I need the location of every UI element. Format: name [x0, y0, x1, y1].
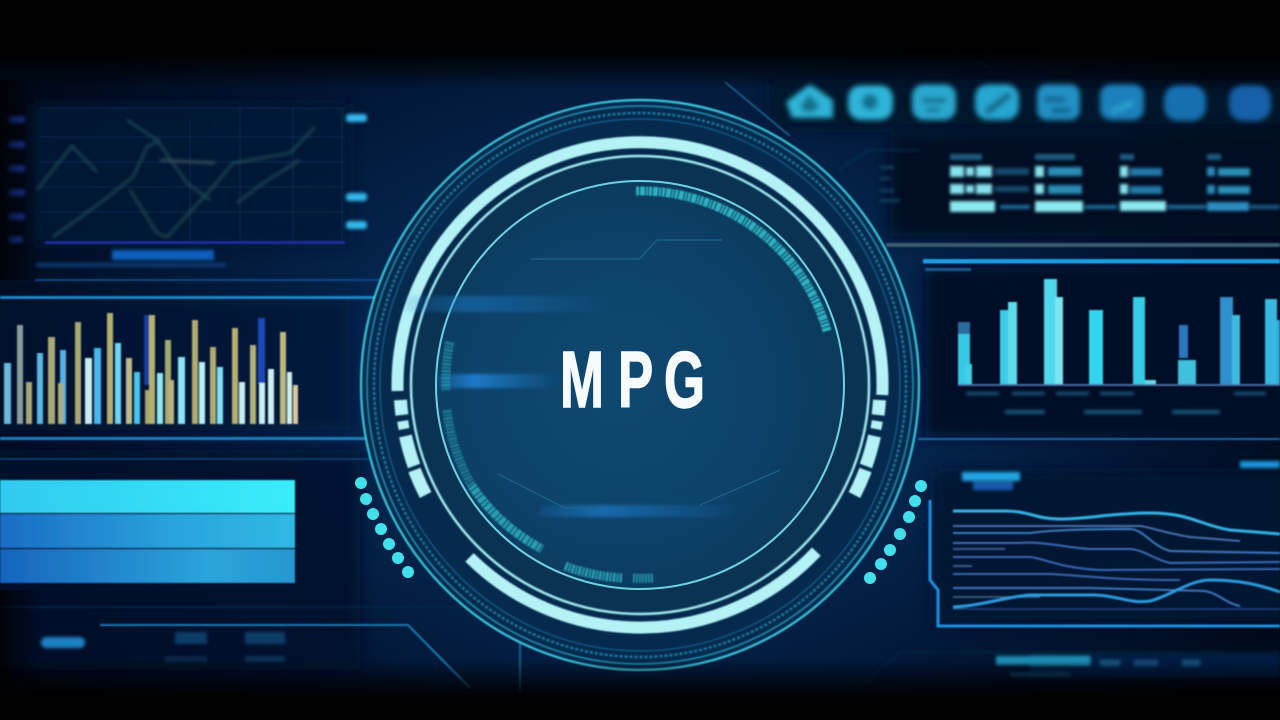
faint lines	[953, 526, 1280, 609]
top pill	[1240, 461, 1280, 468]
gauge middle field	[411, 156, 869, 614]
bottom bright line	[953, 580, 1280, 607]
readout blocks	[165, 632, 285, 662]
icon: tile 1	[786, 84, 833, 118]
gauge thick ring arcs	[398, 142, 883, 628]
vertical tick	[519, 642, 521, 690]
data text arcs	[446, 191, 827, 578]
right divider lines	[240, 46, 1280, 440]
left axis pills	[8, 116, 25, 243]
panel: top right data table	[838, 150, 1280, 212]
progress dots: right	[864, 480, 927, 584]
title: MPG	[560, 336, 705, 425]
table row 2	[950, 184, 1250, 194]
panel: top left line chart	[8, 108, 367, 267]
bar chart: left tan and blue bars	[4, 313, 298, 424]
circuit traces	[498, 240, 780, 508]
table header row	[950, 154, 1221, 160]
chart frame	[930, 500, 1280, 626]
bar chart: right cyan bars	[925, 268, 1280, 414]
gauge inner ring	[411, 156, 869, 614]
chart grid	[40, 108, 345, 243]
progress dots: left	[355, 477, 414, 578]
top bright line	[953, 511, 1280, 534]
chart axis	[45, 241, 345, 244]
table row 3	[950, 201, 1280, 212]
table row 1	[950, 166, 1250, 177]
icon: tile 3	[912, 84, 956, 120]
icon: tile 2	[848, 85, 893, 120]
bracket line	[100, 625, 470, 688]
bar chart caption	[925, 268, 971, 271]
gauge: central circular dial	[361, 100, 919, 670]
panel: right line chart	[930, 461, 1280, 626]
icon: tile 5	[1037, 84, 1080, 120]
readout pill	[41, 637, 85, 648]
table side labels	[880, 166, 900, 202]
chart caption	[36, 250, 226, 267]
gauge outer rings	[361, 100, 919, 670]
panel: top right icon row	[786, 84, 1271, 121]
chart lines	[37, 120, 315, 237]
gauge outer field	[361, 100, 919, 670]
bar baseline	[958, 384, 1280, 386]
bar labels	[966, 392, 1266, 414]
icon: tile 4	[975, 84, 1019, 120]
left divider lines	[0, 279, 410, 460]
glow streaks	[405, 296, 740, 517]
right axis pills	[346, 114, 367, 229]
connector bracket	[838, 150, 920, 170]
panel: bottom left readout	[0, 606, 521, 690]
icon: tile 7	[1164, 85, 1206, 121]
icon: tile 8	[1229, 85, 1271, 121]
icon: tile 6	[1100, 84, 1144, 120]
panel: left stacked horizontal bars	[0, 480, 295, 583]
gauge disk	[436, 181, 844, 589]
chart tab	[962, 472, 1020, 490]
panel: bottom right readout	[860, 652, 1280, 688]
